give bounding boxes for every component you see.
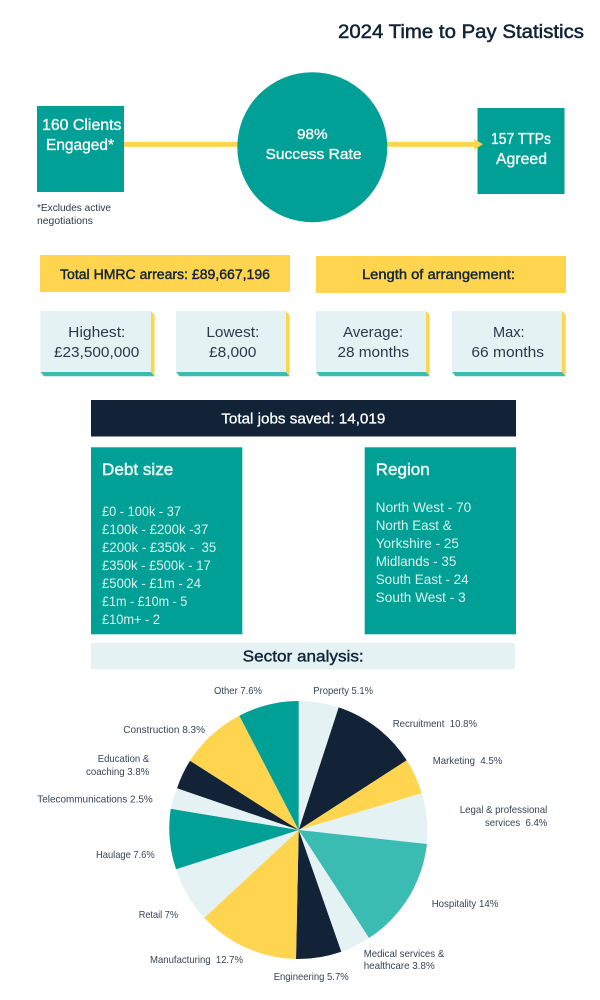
banner: total jobs saved: Total jobs saved: 14,019	[221, 410, 385, 427]
circle: success rate: Success Rate	[266, 146, 362, 163]
panel: region: South West - 3	[376, 590, 466, 605]
pie labels: coaching 3.8%	[86, 767, 149, 778]
pie labels: Other 7.6%	[214, 686, 262, 697]
icon: arrow head	[474, 139, 483, 150]
card: average	[316, 311, 430, 376]
panel: debt size: £350k - £500k - 17	[102, 558, 211, 573]
pie labels: Engineering 5.7%	[274, 972, 349, 983]
panel: debt size	[91, 447, 242, 634]
panel: debt size: £0 - 100k - 37	[102, 504, 181, 519]
box: clients engaged	[37, 106, 124, 192]
pie labels: Property 5.1%	[313, 686, 373, 697]
pie labels: Telecommunications 2.5%	[37, 795, 153, 806]
pie labels: services 6.4%	[485, 818, 547, 829]
box: clients engaged: 160 Clients	[42, 117, 122, 134]
pie labels: Manufacturing 12.7%	[150, 955, 243, 966]
panel: debt size: £10m+ - 2	[102, 612, 160, 627]
arrow: clients to success rate to TTPs	[124, 142, 476, 147]
card: max	[452, 311, 566, 376]
footnote: negotiations	[37, 216, 93, 227]
heading: total HMRC arrears: Total HMRC arrears: £89,667,196	[60, 267, 270, 282]
panel: region	[365, 447, 516, 634]
panel: debt size: £500k - £1m - 24	[102, 576, 201, 591]
card: highest: £23,500,000	[54, 344, 139, 361]
panel: region: Yorkshire - 25	[376, 536, 459, 551]
heading: sector analysis	[91, 643, 515, 669]
box: clients engaged: Engaged*	[46, 137, 114, 154]
pie labels: Legal & professional	[460, 805, 547, 816]
panel: region: North West - 70	[376, 500, 472, 515]
card: max: Max:	[493, 324, 525, 341]
panel: debt size: £100k - £200k -37	[102, 522, 208, 537]
heading: length of arrangement	[316, 256, 566, 293]
card: max: 66 months	[471, 344, 544, 361]
card: average: Average:	[343, 324, 403, 341]
panel: region: Midlands - 35	[376, 554, 456, 569]
footnote: *Excludes active	[37, 203, 111, 214]
card: lowest	[176, 311, 290, 376]
box: TTPs agreed	[478, 108, 564, 194]
pie labels: Retail 7%	[139, 910, 178, 921]
card: highest	[40, 311, 155, 376]
pie labels: Medical services &	[364, 949, 444, 960]
panel: debt size: £200k - £350k - 35	[102, 540, 216, 555]
banner: total jobs saved	[91, 400, 516, 436]
pie labels: Construction 8.3%	[123, 725, 205, 736]
panel: debt size: £1m - £10m - 5	[102, 594, 187, 609]
heading: length of arrangement: Length of arrangement:	[362, 267, 515, 282]
pie chart: sector analysis	[169, 701, 428, 959]
card: highest: Highest:	[68, 324, 125, 341]
flow diagram: clients to agreed TTPs	[37, 72, 564, 227]
heading: total HMRC arrears	[40, 255, 290, 292]
pie labels: Education &	[98, 754, 149, 765]
pie labels: Haulage 7.6%	[96, 850, 155, 861]
pie labels: Hospitality 14%	[432, 899, 498, 910]
box: TTPs agreed: 157 TTPs	[491, 131, 551, 148]
panel: region: Region	[376, 460, 430, 479]
panel: region: North East &	[376, 518, 452, 533]
card: lowest: £8,000	[209, 344, 256, 361]
card: average: 28 months	[338, 344, 409, 361]
title: 2024 Time to Pay Statistics	[338, 22, 584, 43]
circle: success rate: 98%	[297, 126, 328, 143]
card: lowest: Lowest:	[206, 324, 259, 341]
footnote	[37, 203, 111, 227]
pie labels: Marketing 4.5%	[433, 756, 502, 767]
circle: success rate	[237, 72, 387, 222]
heading: sector analysis: Sector analysis:	[243, 649, 364, 666]
panel: debt size: Debt size	[102, 460, 173, 479]
pie labels: Recruitment 10.8%	[393, 719, 477, 730]
pie labels	[37, 686, 547, 983]
pie labels: healthcare 3.8%	[364, 961, 435, 972]
box: TTPs agreed: Agreed	[496, 151, 547, 168]
panel: region: South East - 24	[376, 572, 469, 587]
